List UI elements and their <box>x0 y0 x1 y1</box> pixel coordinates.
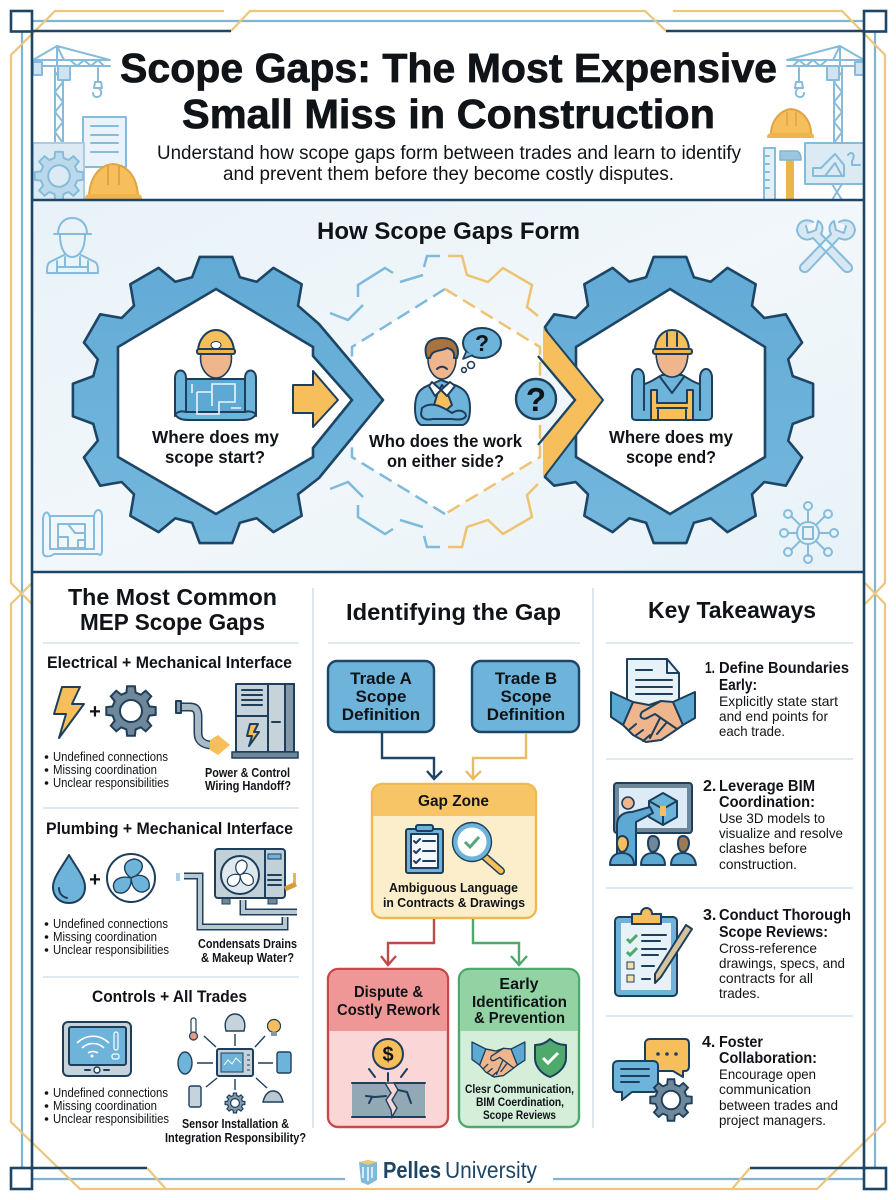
bullet list: Unclear responsibilities <box>53 776 169 790</box>
caption: Sensor Installation & <box>182 1117 289 1131</box>
takeaway 2 <box>610 778 843 872</box>
takeaway 2: visualize and resolve <box>719 825 843 841</box>
subheading: Electrical + Mechanical Interface <box>47 654 292 672</box>
box: trade A: Scope <box>355 687 407 706</box>
icon: document <box>83 117 126 167</box>
bullet list: Unclear responsibilities <box>53 943 169 957</box>
icon: shield <box>535 1039 566 1077</box>
icon: worker with overalls <box>632 330 712 420</box>
panel: how scope gaps form <box>33 200 864 572</box>
takeaway 2: Leverage BIM <box>719 778 815 795</box>
takeaway 3: Conduct Thorough <box>719 907 851 924</box>
icon: checklist clipboard <box>406 825 443 873</box>
caption: Condensats Drains <box>198 937 297 951</box>
middle dashed gear <box>330 256 540 547</box>
takeaway 4: Encourage open <box>719 1066 816 1082</box>
heading: Key Takeaways <box>648 597 816 623</box>
box: early identification: & Prevention <box>474 1010 565 1027</box>
text: left gear: Where does my <box>152 427 279 447</box>
heading: MEP Scope Gaps <box>80 609 265 635</box>
box: gap zone: Ambiguous Language <box>389 880 518 895</box>
text: left gear <box>152 427 279 467</box>
logo: Pelles University: Pelles <box>383 1157 441 1183</box>
icon: fan <box>107 854 155 902</box>
title: Small Miss in Construction <box>182 91 715 137</box>
text: middle: Who does the work <box>369 431 522 451</box>
takeaway 1: and end points for <box>719 708 828 724</box>
icon: BIM presentation <box>610 783 696 865</box>
box: trade B <box>472 661 579 732</box>
box: gap zone: in Contracts & Drawings <box>383 895 525 910</box>
text: right gear: scope end? <box>626 447 716 467</box>
caption <box>205 766 291 793</box>
icon: thought bubble <box>462 328 501 372</box>
heading <box>68 584 277 635</box>
icon: book logo <box>359 1160 377 1185</box>
plus sign: + <box>89 701 101 723</box>
gold dashed hex and gear <box>445 256 540 547</box>
caption: Integration Responsibility? <box>165 1131 306 1145</box>
arrow: trade B to gap <box>466 733 526 779</box>
panel: most common MEP scope gaps <box>43 584 306 1145</box>
icon: question circle: ? <box>526 381 546 418</box>
text: right gear <box>609 427 733 467</box>
box: early identification: Clesr Communication, <box>465 1082 574 1096</box>
caption <box>165 1117 306 1145</box>
logo: Pelles University <box>359 1157 537 1185</box>
box: early identification: Scope Reviews <box>483 1108 556 1122</box>
bullet list: Undefined connections <box>53 750 168 764</box>
controls block <box>45 987 306 1145</box>
subheading: Controls + All Trades <box>92 987 247 1006</box>
arrow: to prevention <box>473 919 527 965</box>
blue dashed gear half <box>330 256 440 547</box>
takeaway 1: Early: <box>719 677 757 694</box>
takeaway 4: Foster <box>719 1034 763 1051</box>
box: dispute: Costly Rework <box>337 1002 440 1019</box>
icon: clipboard and pencil <box>615 908 692 996</box>
heading: Identifying the Gap <box>346 599 561 625</box>
takeaway 2: Use 3D models to <box>719 810 825 826</box>
icon: condenser unit and pipes <box>178 849 297 927</box>
icon: tablet <box>63 1022 131 1076</box>
icon: right hard hat <box>767 109 814 138</box>
takeaway 4: project managers. <box>719 1112 826 1128</box>
text: middle <box>369 431 522 471</box>
takeaway 4: Collaboration: <box>719 1050 817 1067</box>
takeaway 3: drawings, specs, and <box>719 955 845 971</box>
icon: blueprint panel <box>805 143 864 200</box>
caption: Wiring Handoff? <box>205 779 291 793</box>
box: trade A <box>328 661 434 732</box>
takeaway 1: each trade. <box>719 723 785 739</box>
heading: The Most Common <box>68 584 277 610</box>
box: early identification: Early <box>499 976 539 993</box>
icon: hammer <box>780 151 801 200</box>
icon: crossed wrenches <box>797 220 855 272</box>
icon: document handshake <box>611 659 695 742</box>
title: Scope Gaps: The Most Expensive <box>120 45 777 91</box>
icon: confused person <box>415 338 470 425</box>
diagram: controls hub <box>178 1014 291 1113</box>
left gear <box>73 257 383 543</box>
icon: ruler <box>764 148 775 200</box>
icon: pipe with arrow <box>176 701 230 755</box>
icon: gold hard hat <box>85 164 142 199</box>
electrical mechanical block <box>45 654 298 793</box>
icon: falling coin and cracked slab: $ <box>382 1044 394 1066</box>
panel: key takeaways <box>606 597 853 1128</box>
bullet list <box>45 917 169 957</box>
plumbing mechanical block <box>45 820 297 965</box>
bullet list <box>45 1086 169 1126</box>
right gear <box>545 257 813 543</box>
bullet list: Missing coordination <box>53 1099 157 1113</box>
icon: right crane <box>787 46 864 143</box>
takeaway 2: Coordination: <box>719 794 815 811</box>
box: dispute <box>328 969 448 1127</box>
takeaway 3: Cross-reference <box>719 940 817 956</box>
icon: falling coin and cracked slab <box>352 1039 425 1117</box>
takeaway 4: between trades and <box>719 1097 838 1113</box>
takeaway 4: 4. <box>702 1034 715 1051</box>
bullet list: Undefined connections <box>53 917 168 931</box>
text: left gear: scope start? <box>165 447 265 467</box>
takeaway 3: Scope Reviews: <box>719 924 828 941</box>
icon: chat bubbles and gear <box>613 1039 692 1121</box>
gold chevron <box>538 327 603 477</box>
takeaway 4: communication <box>719 1081 811 1097</box>
icon: electrical unit <box>232 684 298 758</box>
plus sign: + <box>89 869 101 891</box>
takeaway 1: Explicitly state start <box>719 693 838 709</box>
text: middle: on either side? <box>387 451 504 471</box>
bullet list: Unclear responsibilities <box>53 1112 169 1126</box>
icon: gear <box>106 686 156 736</box>
box: early identification: Identification <box>472 994 567 1011</box>
takeaway 1: Define Boundaries <box>719 660 849 677</box>
icon: left crane <box>33 46 110 143</box>
bullet list <box>45 750 169 790</box>
subtitle: Understand how scope gaps form between trades and learn to identify <box>157 142 741 164</box>
icon: blueprint outline <box>43 510 102 556</box>
icon: thought bubble: ? <box>475 330 489 356</box>
caption: & Makeup Water? <box>201 951 294 965</box>
icon: water drop <box>53 855 85 903</box>
logo: Pelles University: University <box>445 1157 537 1183</box>
arrow: to dispute <box>381 919 434 965</box>
takeaway 1: 1. <box>705 660 715 677</box>
takeaway 2: construction. <box>719 856 797 872</box>
takeaway 2: 2. <box>703 778 716 795</box>
box: dispute: Dispute & <box>354 984 423 1001</box>
takeaway 1 <box>611 659 849 742</box>
box: trade A: Definition <box>342 705 420 724</box>
caption: Power & Control <box>205 766 290 780</box>
takeaway 3: contracts for all <box>719 970 813 986</box>
arrow: trade A to gap <box>382 733 442 779</box>
takeaway 3: 3. <box>703 907 716 924</box>
takeaway 3 <box>615 907 851 1001</box>
icon: magnifier <box>452 822 501 871</box>
subtitle <box>157 142 741 185</box>
box: gap zone: Gap Zone <box>418 793 489 810</box>
bullet list: Undefined connections <box>53 1086 168 1100</box>
caption <box>198 937 297 965</box>
box: trade B: Definition <box>487 705 565 724</box>
panel: identifying the gap <box>328 599 580 1127</box>
bullet list: Missing coordination <box>53 763 157 777</box>
arrow: gold <box>293 371 338 427</box>
box: gap zone <box>372 784 536 918</box>
box: trade B: Trade B <box>495 669 557 688</box>
white hex fill <box>352 289 540 514</box>
takeaway 2: clashes before <box>719 840 807 856</box>
title <box>120 45 777 137</box>
box: trade B: Scope <box>500 687 552 706</box>
takeaway 3: trades. <box>719 985 760 1001</box>
subheading: Plumbing + Mechanical Interface <box>46 820 293 838</box>
icon: lightning bolt <box>54 687 84 738</box>
panel: header <box>33 45 864 200</box>
section divider lines <box>33 200 864 572</box>
icon: handshake <box>472 1042 525 1077</box>
icon: builder with blueprint <box>175 330 256 420</box>
icon: worker outline <box>47 218 98 273</box>
text: right gear: Where does my <box>609 427 733 447</box>
box: trade A: Trade A <box>350 669 412 688</box>
bullet list: Missing coordination <box>53 930 157 944</box>
subtitle: and prevent them before they become costly disputes. <box>223 163 674 185</box>
heading: how scope gaps form: How Scope Gaps Form <box>317 218 580 245</box>
blue dashed hex <box>352 289 445 514</box>
icon: gear panel <box>33 143 84 200</box>
takeaway 4 <box>613 1034 838 1128</box>
box: early identification <box>459 969 579 1127</box>
box: early identification: BIM Coerdination, <box>476 1095 564 1109</box>
icon: question circle <box>516 379 556 419</box>
icon: network sensor <box>780 502 838 563</box>
